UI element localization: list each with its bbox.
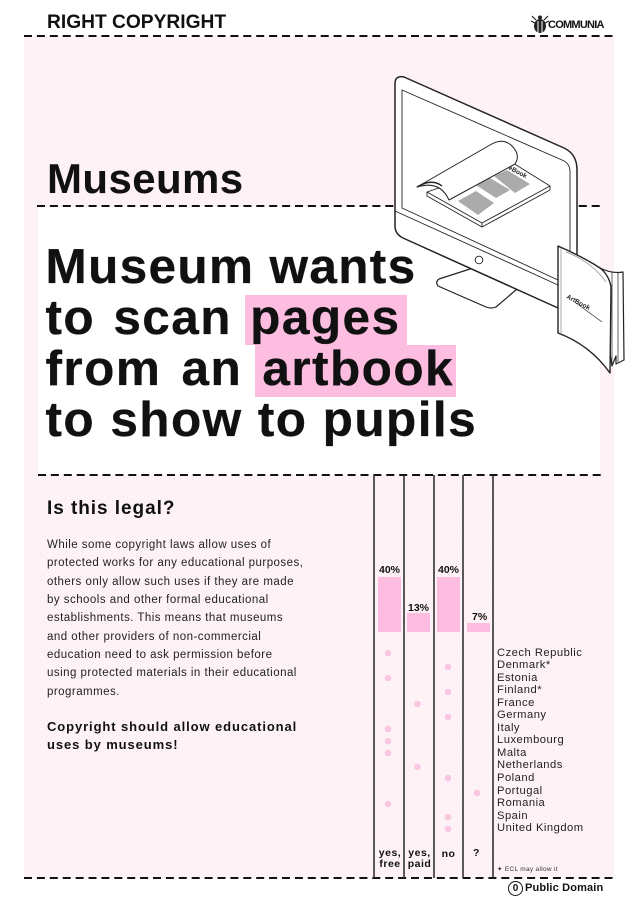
country dots bbox=[385, 650, 480, 832]
on-screen book bbox=[417, 141, 550, 227]
body text: others only allow such uses if they are made bbox=[47, 576, 294, 588]
main title: from an artbook bbox=[46, 341, 454, 396]
call to action: uses by museums! bbox=[47, 737, 178, 752]
country list: Portugal bbox=[497, 785, 543, 797]
country list: Luxembourg bbox=[497, 734, 564, 746]
monitor stand bbox=[437, 268, 517, 308]
body text: While some copyright laws allow uses of bbox=[47, 539, 271, 551]
column labels: yes, bbox=[379, 847, 401, 859]
main title: to scan pages bbox=[46, 290, 400, 345]
call to action bbox=[47, 719, 297, 752]
country list: Italy bbox=[497, 722, 520, 734]
logo: Communia bbox=[530, 16, 604, 33]
series label: RIGHT COPYRIGHT bbox=[47, 12, 226, 33]
percent labels: 40% bbox=[438, 564, 459, 576]
artbook bbox=[558, 246, 624, 373]
country list: Finland* bbox=[497, 684, 542, 696]
main title: Museum wants bbox=[46, 239, 417, 294]
main title: to show to pupils bbox=[46, 392, 477, 447]
percent labels: 40% bbox=[379, 564, 400, 576]
column labels: paid bbox=[408, 858, 431, 870]
illustration: monitor and books: eBook bbox=[507, 165, 528, 180]
body text: and other providers of non-commercial bbox=[47, 631, 261, 643]
highlight: artbook bbox=[255, 345, 456, 397]
bars bbox=[378, 577, 490, 632]
column rules bbox=[374, 475, 493, 878]
illustration: monitor and books: ArtBook bbox=[565, 294, 591, 312]
column labels: yes, bbox=[408, 847, 431, 859]
main title bbox=[46, 239, 477, 447]
body text: by schools and other formal educational bbox=[47, 594, 269, 606]
country list: Estonia bbox=[497, 672, 538, 684]
public domain mark: Public Domain bbox=[525, 882, 603, 894]
country list bbox=[497, 646, 584, 834]
body text: education need to ask permission before bbox=[47, 649, 272, 661]
subheading: Is this legal? bbox=[47, 498, 175, 519]
country list: Poland bbox=[497, 772, 535, 784]
country list: Germany bbox=[497, 709, 547, 721]
country list: France bbox=[497, 697, 535, 709]
body text: programmes. bbox=[47, 686, 120, 698]
percent labels: 13% bbox=[408, 602, 429, 614]
country list: Malta bbox=[497, 747, 527, 759]
country list: United Kingdom bbox=[497, 822, 584, 834]
logo: Communia: COMMUNIA bbox=[548, 19, 604, 31]
highlight: pages bbox=[245, 295, 407, 345]
country list: Romania bbox=[497, 797, 545, 809]
country list: Denmark* bbox=[497, 659, 551, 671]
call to action: Copyright should allow educational bbox=[47, 719, 297, 734]
percent labels: 7% bbox=[472, 611, 487, 623]
public domain mark: 0 bbox=[513, 883, 518, 894]
country list: Spain bbox=[497, 810, 528, 822]
body text: using protected materials in their educational bbox=[47, 667, 297, 679]
monitor body bbox=[395, 77, 577, 320]
heading: Museums: Museums bbox=[47, 155, 244, 202]
country list: Czech Republic bbox=[497, 646, 582, 658]
body text: establishments. This means that museums bbox=[47, 612, 283, 624]
column labels: no bbox=[442, 848, 455, 860]
body text bbox=[47, 539, 303, 698]
footnote: ✦ ECL may allow it bbox=[497, 866, 558, 873]
public domain mark bbox=[508, 881, 603, 896]
body text: protected works for any educational purposes, bbox=[47, 557, 303, 569]
column labels: ? bbox=[473, 847, 480, 859]
country list: Netherlands bbox=[497, 759, 563, 771]
column labels: free bbox=[379, 858, 401, 870]
